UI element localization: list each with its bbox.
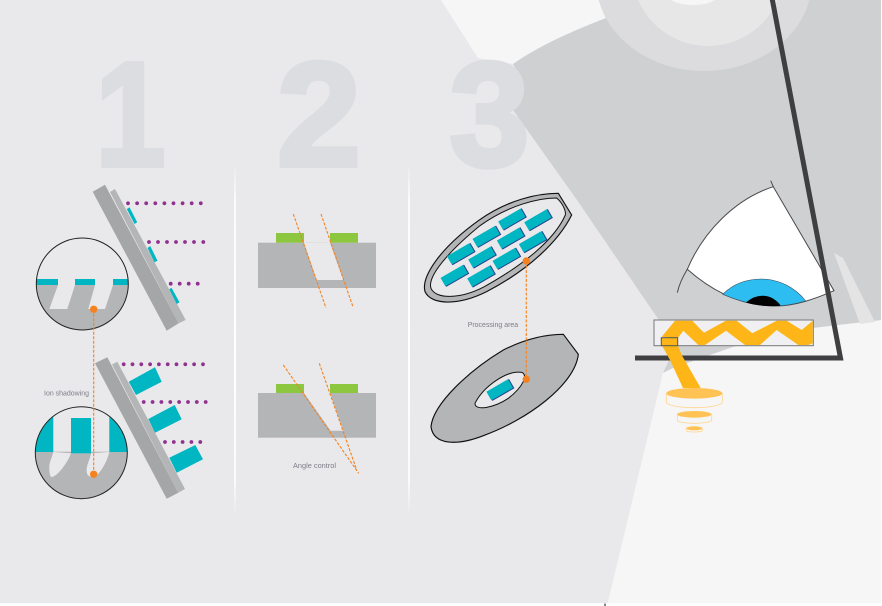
large disc: [666, 388, 722, 408]
panel 1: ion shadowing: [30, 185, 208, 502]
divider 2: [408, 163, 410, 516]
light beam leg: [662, 345, 701, 388]
lower ion dots: [122, 362, 208, 444]
panel 3: processing area: [424, 193, 578, 442]
lens rectangle: [654, 320, 813, 346]
iris: [723, 279, 806, 306]
number 1: 1: [96, 33, 165, 198]
lower tilted plate: [95, 357, 203, 499]
upper ion dots: [126, 201, 205, 286]
orange dashed connector: [90, 306, 97, 478]
lower magnified circle: [34, 406, 128, 500]
panel 2: angle control: [258, 214, 376, 473]
lower etched block: [258, 363, 376, 473]
background: bottom light area: [607, 320, 882, 606]
background: dark grey shape: [513, 0, 882, 373]
background: top concentric circles: [596, 0, 812, 71]
number 2: 2: [277, 32, 361, 197]
orange dashed connector: [523, 257, 530, 383]
zigzag light path: [662, 321, 813, 345]
small disc: [686, 426, 702, 432]
optical path: [654, 320, 813, 432]
frame lines: [635, 0, 840, 358]
lower wafer with aperture: [431, 334, 578, 442]
label: ion shadowing: Ion shadowing: [44, 390, 89, 398]
background: light strip: [834, 253, 875, 324]
pupil: [746, 296, 781, 306]
eye white: [687, 187, 834, 306]
upper wafer: [424, 193, 572, 302]
number 3: 3: [450, 32, 529, 197]
label: processing area: Processing area: [468, 322, 518, 329]
upper etched block: [258, 214, 376, 308]
divider 1: [234, 163, 236, 516]
upper magnified circle: [36, 238, 129, 330]
medium disc: [677, 411, 712, 423]
eye illustration: [677, 181, 834, 306]
upper tilted plate: [93, 185, 186, 331]
small sensor box: [661, 338, 678, 346]
background: light top wedge: [441, 0, 610, 64]
label: angle control: Angle control: [293, 463, 336, 470]
eye extension lines: [677, 181, 773, 293]
